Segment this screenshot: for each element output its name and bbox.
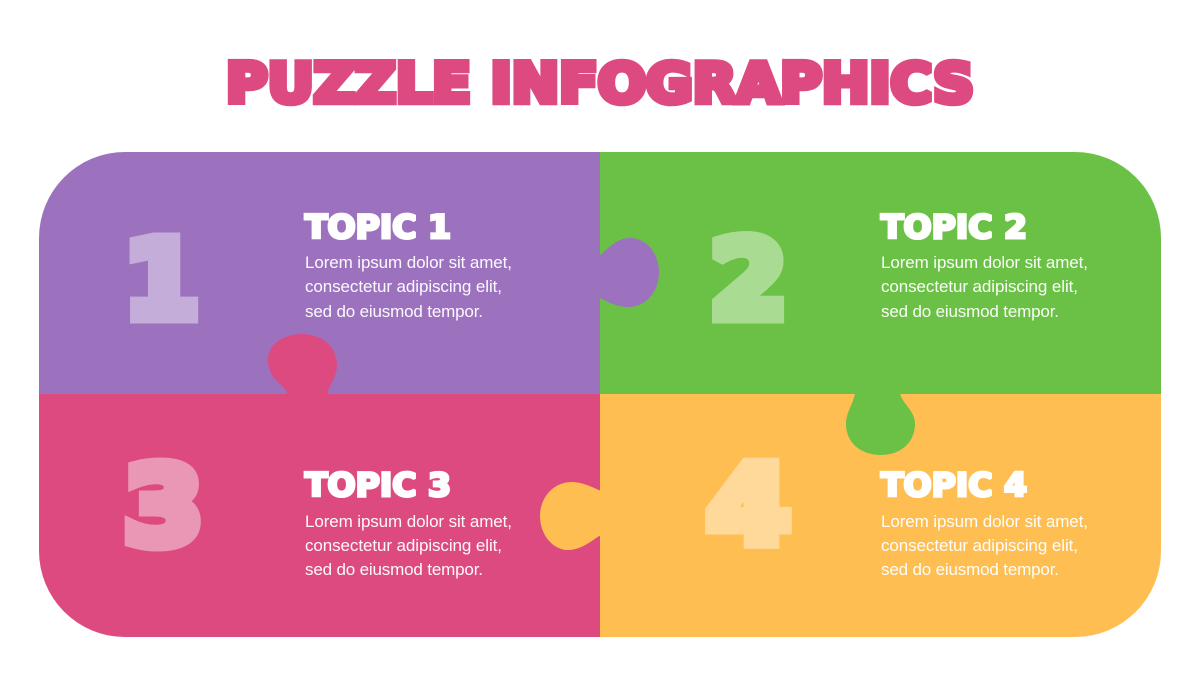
number 2: 2	[710, 219, 787, 343]
piece background purple	[39, 152, 600, 394]
piece background orange	[600, 394, 1161, 637]
puzzle knob: orange into pink	[540, 482, 601, 550]
panel: topic 1 purple piece	[39, 152, 600, 394]
text block: topic 1: consectetur adipiscing elit,	[305, 277, 502, 296]
puzzle knob: pink into purple	[268, 334, 337, 395]
text block: topic 2: sed do eiusmod tempor.	[881, 302, 1059, 321]
heading: topic 3: TOPIC 3	[305, 466, 451, 504]
text block: topic 1	[305, 253, 512, 321]
panel: topic 3 pink piece	[39, 394, 600, 637]
text block: topic 4: consectetur adipiscing elit,	[881, 536, 1078, 555]
puzzle board	[39, 152, 1161, 637]
number 3: 3	[124, 446, 203, 570]
text block: topic 2	[881, 253, 1088, 321]
text block: topic 2: consectetur adipiscing elit,	[881, 277, 1078, 296]
panel: topic 4 orange piece	[600, 394, 1161, 637]
text block: topic 1: sed do eiusmod tempor.	[305, 302, 483, 321]
text block: topic 4	[881, 512, 1088, 579]
title: PUZZLE INFOGRAPHICS	[226, 52, 974, 115]
text block: topic 3: Lorem ipsum dolor sit amet,	[305, 512, 512, 531]
text block: topic 1: Lorem ipsum dolor sit amet,	[305, 253, 512, 272]
text block: topic 2: Lorem ipsum dolor sit amet,	[881, 253, 1088, 272]
piece background pink	[39, 394, 600, 637]
panel: topic 2 green piece	[600, 152, 1161, 394]
number 4: 4	[707, 444, 790, 568]
number 1: 1	[124, 219, 199, 343]
heading: topic 1: TOPIC 1	[305, 208, 451, 246]
heading: topic 2: TOPIC 2	[881, 208, 1027, 246]
piece background green	[600, 152, 1161, 394]
puzzle knob: green into orange	[846, 393, 915, 455]
text block: topic 4: sed do eiusmod tempor.	[881, 560, 1059, 579]
heading: topic 4: TOPIC 4	[881, 466, 1027, 504]
puzzle knob: purple into green	[600, 238, 659, 307]
text block: topic 3: sed do eiusmod tempor.	[305, 560, 483, 579]
text block: topic 4: Lorem ipsum dolor sit amet,	[881, 512, 1088, 531]
text block: topic 3	[305, 512, 512, 579]
text block: topic 3: consectetur adipiscing elit,	[305, 536, 502, 555]
